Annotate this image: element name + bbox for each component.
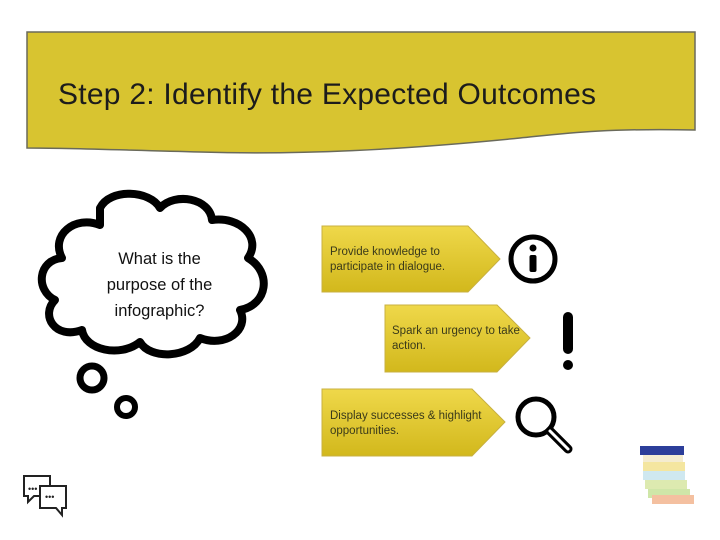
arrow text 1: participate in dialogue. <box>330 261 445 273</box>
icon: chat bubbles: ••• <box>28 484 37 494</box>
arrow 1 <box>322 226 500 292</box>
arrow 3 <box>322 389 505 456</box>
arrow text 2: Spark an urgency to take <box>392 325 520 337</box>
icon: magnifier <box>518 399 568 449</box>
icon: exclamation <box>563 312 573 370</box>
arrow text 3: opportunities. <box>330 425 399 437</box>
arrow text 2 <box>392 325 520 352</box>
arrow text 3: Display successes & highlight <box>330 410 482 422</box>
icon: info <box>511 237 555 281</box>
title: Step 2: Identify the Expected Outcomes <box>58 78 596 111</box>
arrow text 3 <box>330 410 482 437</box>
icon: step stack <box>640 446 694 504</box>
cloud text: What is the purpose of the infographic? <box>107 250 212 320</box>
arrow text 2: action. <box>392 340 426 352</box>
arrow text 1 <box>330 246 445 273</box>
icon: chat bubbles <box>24 476 66 515</box>
arrow 2 <box>385 305 530 372</box>
thought cloud <box>38 190 268 419</box>
banner <box>26 31 696 154</box>
arrow text 1: Provide knowledge to <box>330 246 440 258</box>
icon: chat bubbles: ••• <box>45 492 54 502</box>
